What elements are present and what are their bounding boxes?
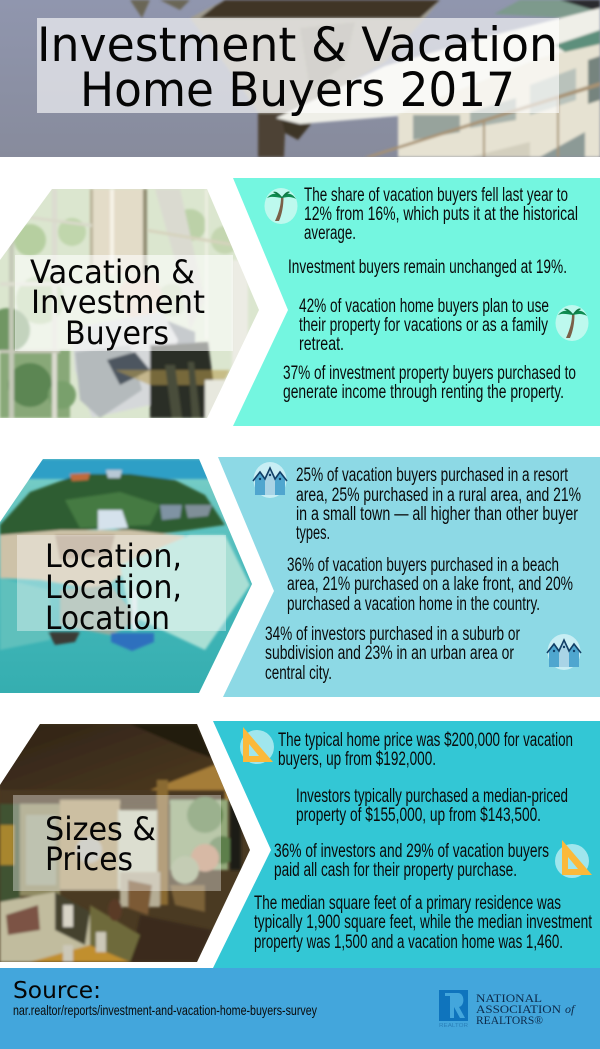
logo: national association of realtors wordmark: [476, 991, 576, 1027]
text: vacation home plans: [299, 296, 549, 355]
text: share of vacation buyers: [304, 185, 578, 244]
heading: sizes and prices: Prices: [45, 840, 133, 878]
heading: location: Location: [45, 599, 170, 637]
icon: houses right: [547, 634, 581, 670]
header photo: palm tree and beach house: [0, 0, 600, 157]
heading: location: [45, 537, 182, 637]
heading: location: Location,: [45, 537, 182, 575]
icon: palm tree right: [556, 305, 588, 341]
walls: [398, 42, 600, 157]
text: typical home price: [278, 730, 573, 770]
text: investors suburb and urban: central city.: [265, 663, 332, 684]
railing: [364, 82, 600, 157]
source url: nar.realtor/reports/investment-and-vacation-home-buyers-survey: [13, 1002, 317, 1018]
icon: set square: [240, 727, 274, 764]
roof tower: [496, 0, 592, 18]
text: rental income: [283, 363, 576, 403]
title: [37, 18, 559, 118]
heading: vacation and investment buyers: Buyers: [65, 314, 169, 352]
heading: sizes and prices: [45, 810, 156, 878]
panel: sizes and prices facts: [213, 721, 600, 968]
heading: vacation and investment buyers: [30, 253, 205, 352]
text: resort, rural, small town: types.: [296, 523, 330, 544]
frond mass: [190, 2, 438, 114]
logo: national association of realtors wordmark: ASSOCIATION: [476, 1002, 561, 1016]
text: investors median price: [296, 786, 568, 826]
logo: national association of realtors wordmark: of: [565, 1002, 576, 1016]
logo: realtor block R: [439, 990, 468, 1029]
title: Home Buyers 2017: [80, 63, 515, 118]
heading: vacation and investment buyers: Investment: [31, 283, 205, 321]
icon: set square right: [555, 840, 592, 878]
text: beach, lake front, country: [287, 555, 573, 615]
panel: location facts: [218, 457, 600, 697]
source label: Source:: [13, 978, 101, 1004]
icon: houses: [253, 462, 287, 498]
heading: location: Location,: [45, 568, 182, 606]
icon: palm tree: [264, 188, 298, 224]
footer band: [0, 968, 600, 1049]
text: investors suburb and urban: subdivision and 23% in an urban area or: [265, 643, 514, 664]
text: share of vacation buyers: average.: [304, 223, 356, 244]
heading: vacation and investment buyers: Vacation &: [30, 253, 195, 291]
panel: vacation and investment buyer facts: [233, 178, 600, 426]
title: Investment & Vacation: [37, 18, 558, 73]
logo: national association of realtors wordmark: REALTORS®: [476, 1013, 543, 1027]
text: resort, rural, small town: [296, 465, 581, 544]
text: median square feet: [254, 893, 593, 953]
panel: sizes and prices photo: [0, 724, 260, 962]
text: all cash: [274, 841, 549, 881]
overhang: [276, 8, 600, 124]
panel: vacation and investment buyers photo: [0, 189, 260, 418]
logo: national association of realtors wordmark: NATIONAL: [476, 991, 542, 1005]
text: investors suburb and urban: [265, 624, 520, 684]
heading: sizes and prices: Sizes &: [45, 810, 156, 848]
logo: realtor block R: REALTOR: [439, 1023, 468, 1029]
text: typical home price: buyers, up from $192,000.: [278, 749, 436, 770]
panel: location aerial photo: [0, 459, 260, 693]
text: vacation home plans: retreat.: [299, 334, 344, 355]
